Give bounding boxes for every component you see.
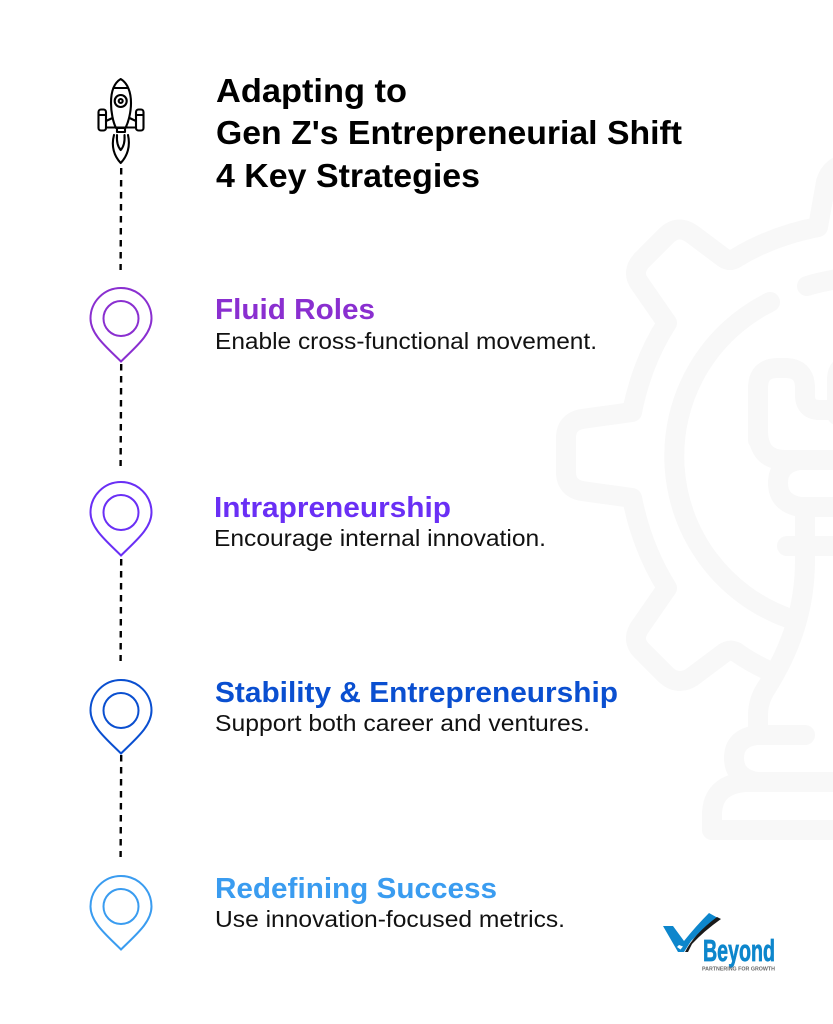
text: Fluid Roles description: Enable cross-functional movement. bbox=[215, 328, 597, 354]
title: Gen Z's Entrepreneurial Shift bbox=[216, 114, 682, 151]
logo: Beyond bbox=[663, 913, 775, 972]
title bbox=[216, 72, 682, 194]
title: Adapting to bbox=[216, 72, 407, 109]
connector: pin 2 to pin 3 bbox=[119, 559, 122, 661]
step 4: Redefining Success bbox=[90, 873, 565, 950]
logo tagline: PARTNERING FOR GROWTH bbox=[702, 966, 775, 972]
logo mark: blue check bbox=[663, 913, 718, 952]
icon: purple location pin bbox=[90, 288, 152, 362]
step 2: Intrapreneurship bbox=[90, 482, 546, 556]
heading: Intrapreneurship: Intrapreneurship bbox=[214, 492, 451, 524]
step 3: Stability & Entrepreneurship bbox=[90, 677, 618, 754]
connector: rocket to first pin bbox=[119, 168, 122, 270]
text: Stability description: Support both career and ventures. bbox=[215, 710, 590, 736]
heading: Stability & Entrepreneurship: Stability & Entrepreneurship bbox=[215, 677, 618, 709]
connector: pin 3 to pin 4 bbox=[119, 755, 122, 857]
logo wordmark: Beyond bbox=[703, 933, 775, 968]
icon: blue location pin bbox=[90, 680, 152, 754]
icon: light blue location pin bbox=[90, 876, 152, 950]
heading: Fluid Roles: Fluid Roles bbox=[215, 294, 375, 326]
heading: Redefining Success: Redefining Success bbox=[215, 873, 497, 905]
logo mark: black swoosh bbox=[685, 917, 721, 952]
icon: rocket bbox=[98, 79, 144, 163]
connector: pin 1 to pin 2 bbox=[119, 364, 122, 466]
text: Redefining Success description: Use innovation-focused metrics. bbox=[215, 906, 565, 932]
text: Intrapreneurship description: Encourage internal innovation. bbox=[214, 525, 546, 551]
step 1: Fluid Roles bbox=[90, 288, 597, 362]
icon: violet location pin bbox=[90, 482, 152, 556]
title: 4 Key Strategies bbox=[216, 157, 480, 194]
background watermark: gear and wrench icon bbox=[566, 163, 833, 830]
